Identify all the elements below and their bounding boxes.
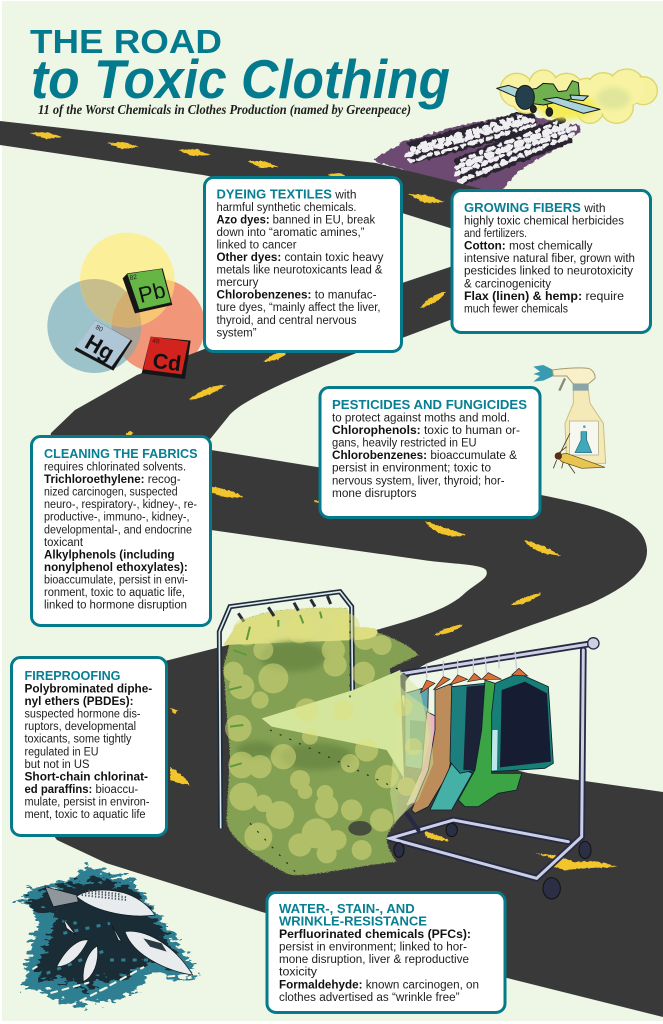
panel: water, stain and wrinkle resistance: mone disruption, liver & reproductive [279, 954, 469, 966]
panel: fireproofing: regulated in EU [24, 746, 98, 758]
panel: water, stain and wrinkle resistance: toxicity [279, 967, 317, 979]
panel: cleaning the fabrics: developmental-, and endocrine [44, 524, 192, 536]
panel: pesticides and fungicides: persist in environment; toxic to [332, 463, 491, 475]
panel: dyeing textiles: linked to cancer [216, 240, 297, 252]
title: THE ROAD [30, 23, 222, 60]
illustration: crop field [372, 115, 582, 195]
panel: cleaning the fabrics: requires chlorinated solvents. [44, 462, 186, 474]
panel: fireproofing: FIREPROOFING [24, 669, 120, 683]
panel: cleaning the fabrics: neuro-, respiratory-, kidney-, re- [44, 499, 197, 511]
panel: pesticides and fungicides: PESTICIDES AND FUNGICIDES [332, 398, 527, 412]
illustration: spray bottle and moth [533, 365, 606, 473]
panel: growing fibers: highly toxic chemical herbicides [464, 216, 624, 228]
dark shadow [24, 878, 180, 989]
tile: lead: Pb [136, 277, 168, 308]
panel: water, stain and wrinkle resistance: Formaldehyde: known carcinogen, on [279, 979, 479, 991]
panel: dyeing textiles: Chlorobenzenes: to manufac- [216, 290, 377, 302]
panel: cleaning the fabrics: linked to hormone disruption [44, 600, 187, 612]
illustration: chemical fog [219, 592, 430, 875]
pale panel over clothes [390, 670, 430, 823]
rack highlight [219, 592, 353, 828]
title [30, 23, 450, 110]
panel: dyeing textiles: harmful synthetic chemicals. [216, 202, 356, 214]
panel: dyeing textiles: down into “aromatic amines,” [216, 227, 365, 239]
panel: water, stain and wrinkle resistance: WRINKLE-RESISTANCE [279, 914, 427, 928]
panel: pesticides and fungicides: nervous system, liver, thyroid; hor- [332, 475, 505, 487]
water stain [19, 864, 199, 1006]
panel: cleaning the fabrics: ronment, toxic to aquatic life, [44, 587, 185, 599]
bottle [565, 390, 606, 463]
teal mottling [40, 917, 150, 973]
green streaks [228, 612, 322, 767]
panel: pesticides and fungicides: to protect against moths and mold. [332, 412, 510, 424]
panel: cleaning the fabrics: nonylphenol ethoxylates): [44, 562, 188, 574]
tile: cadmium [142, 337, 191, 379]
panel: water, stain and wrinkle resistance [267, 892, 505, 1012]
panel: growing fibers: pesticides linked to neurotoxicity [464, 266, 633, 278]
road centre dashes [30, 132, 618, 870]
panel: growing fibers: intensive natural fiber, grown with [464, 253, 635, 265]
panel: dyeing textiles [204, 178, 402, 352]
panel: dyeing textiles: thyroid, and central nervous [216, 315, 357, 327]
panel: cleaning the fabrics: Trichloroethylene: recog- [44, 474, 181, 486]
panel: dyeing textiles: DYEING TEXTILES with [216, 187, 356, 201]
darker patches [237, 642, 353, 770]
panel: pesticides and fungicides: Chlorobenzenes: bioaccumulate & [332, 450, 517, 462]
panel: fireproofing: ed paraffins: bioaccu- [24, 784, 138, 796]
title: to Toxic Clothing [31, 48, 450, 110]
wheels [394, 823, 591, 899]
fish [45, 887, 193, 982]
tile: mercury [74, 320, 132, 371]
panel: water, stain and wrinkle resistance: persist in environment; linked to hor- [279, 942, 467, 954]
panel: dyeing textiles: Azo dyes: banned in EU, break [216, 214, 375, 226]
panel: fireproofing: ment, toxic to aquatic life [24, 809, 146, 821]
panel: pesticides and fungicides: mone disruptors [332, 488, 417, 500]
light cone [262, 670, 404, 778]
moth [556, 453, 605, 468]
panel: cleaning the fabrics: productive-, immuno-, kidney-, [44, 512, 190, 524]
panel: cleaning the fabrics: nized carcinogen, suspected [44, 487, 178, 499]
panel: water, stain and wrinkle resistance: clothes advertised as “wrinkle free” [279, 992, 460, 1004]
pesticide cloud [500, 69, 657, 123]
panel: growing fibers: and fertilizers. [464, 228, 527, 240]
plane [497, 81, 600, 116]
panel: growing fibers: Cotton: most chemically [464, 241, 593, 253]
pale scratches [23, 967, 200, 1006]
panel: water, stain and wrinkle resistance: WATER-, STAIN-, AND [279, 902, 415, 916]
hanging clothes [405, 673, 553, 813]
panel: growing fibers: & carcinogenicity [464, 278, 551, 290]
panel: dyeing textiles: Other dyes: contain toxic heavy [216, 252, 384, 264]
panel: cleaning the fabrics [32, 436, 210, 626]
panel: dyeing textiles: system” [216, 327, 257, 339]
tile: lead [123, 268, 172, 313]
illustration: clothes rack [385, 638, 599, 899]
panel: cleaning the fabrics: CLEANING THE FABRICS [44, 447, 198, 461]
panel: cleaning the fabrics: toxicant [44, 537, 84, 549]
rack clips [238, 596, 331, 622]
stain [348, 821, 372, 836]
fog base [223, 608, 418, 875]
panel: fireproofing: nyl ethers (PBDEs): [24, 696, 134, 708]
panel: pesticides and fungicides [320, 388, 540, 518]
panel: cleaning the fabrics: Alkylphenols (including [44, 549, 175, 561]
panel: pesticides and fungicides: Chlorophenols: toxic to human or- [332, 425, 520, 437]
panel: water, stain and wrinkle resistance: Perfluorinated chemicals (PFCs): [279, 929, 471, 941]
panel: pesticides and fungicides: gans, heavily restricted in EU [332, 438, 477, 450]
panel: fireproofing: mulate, persist in environ- [24, 796, 150, 808]
rack frame [390, 638, 599, 878]
tile: cadmium: 48 [152, 338, 160, 346]
hangers [420, 651, 528, 693]
subtitle: 11 of the Worst Chemicals in Clothes Production (named by Greenpeace) [38, 102, 411, 117]
tile: cadmium: Cd [151, 349, 183, 376]
tile: mercury: 80 [94, 324, 104, 334]
veil over clothes [385, 670, 433, 827]
rack outline [219, 592, 353, 828]
panel: fireproofing: Polybrominated diphe- [24, 684, 152, 696]
panel: cleaning the fabrics: bioaccumulate, persist in envi- [44, 574, 188, 586]
panel: dyeing textiles: ture dyes, “mainly affect the liver, [216, 302, 380, 314]
panel: fireproofing: Short-chain chlorinat- [24, 771, 148, 783]
illustration: dead fish [19, 864, 200, 1006]
panel: growing fibers: much fewer chemicals [464, 303, 568, 315]
panel: fireproofing: ruptors, developmental [24, 721, 136, 733]
label [569, 421, 598, 455]
panel: fireproofing: but not in US [24, 759, 90, 771]
panel: growing fibers: GROWING FIBERS with [464, 201, 606, 215]
panel: dyeing textiles: mercury [216, 277, 259, 289]
spray mist [533, 365, 553, 382]
pale upper fog [223, 608, 378, 645]
panel: fireproofing: suspected hormone dis- [24, 709, 141, 721]
icon: element tiles [74, 268, 191, 379]
panel: dyeing textiles: metals like neurotoxicants lead & [216, 265, 383, 277]
panel: fireproofing [12, 658, 166, 836]
tile: lead: 82 [129, 274, 138, 282]
fish back markings [82, 891, 167, 952]
panel: fireproofing: toxicants, some tightly [24, 734, 132, 746]
fog puffs [223, 613, 422, 863]
panel: growing fibers [452, 190, 650, 332]
fog specks [250, 610, 400, 873]
illustration: crop duster plane [497, 69, 657, 123]
icon: heavy metal circles [47, 233, 205, 373]
panel: growing fibers: Flax (linen) & hemp: require [464, 291, 624, 303]
tile: mercury: Hg [81, 329, 119, 366]
